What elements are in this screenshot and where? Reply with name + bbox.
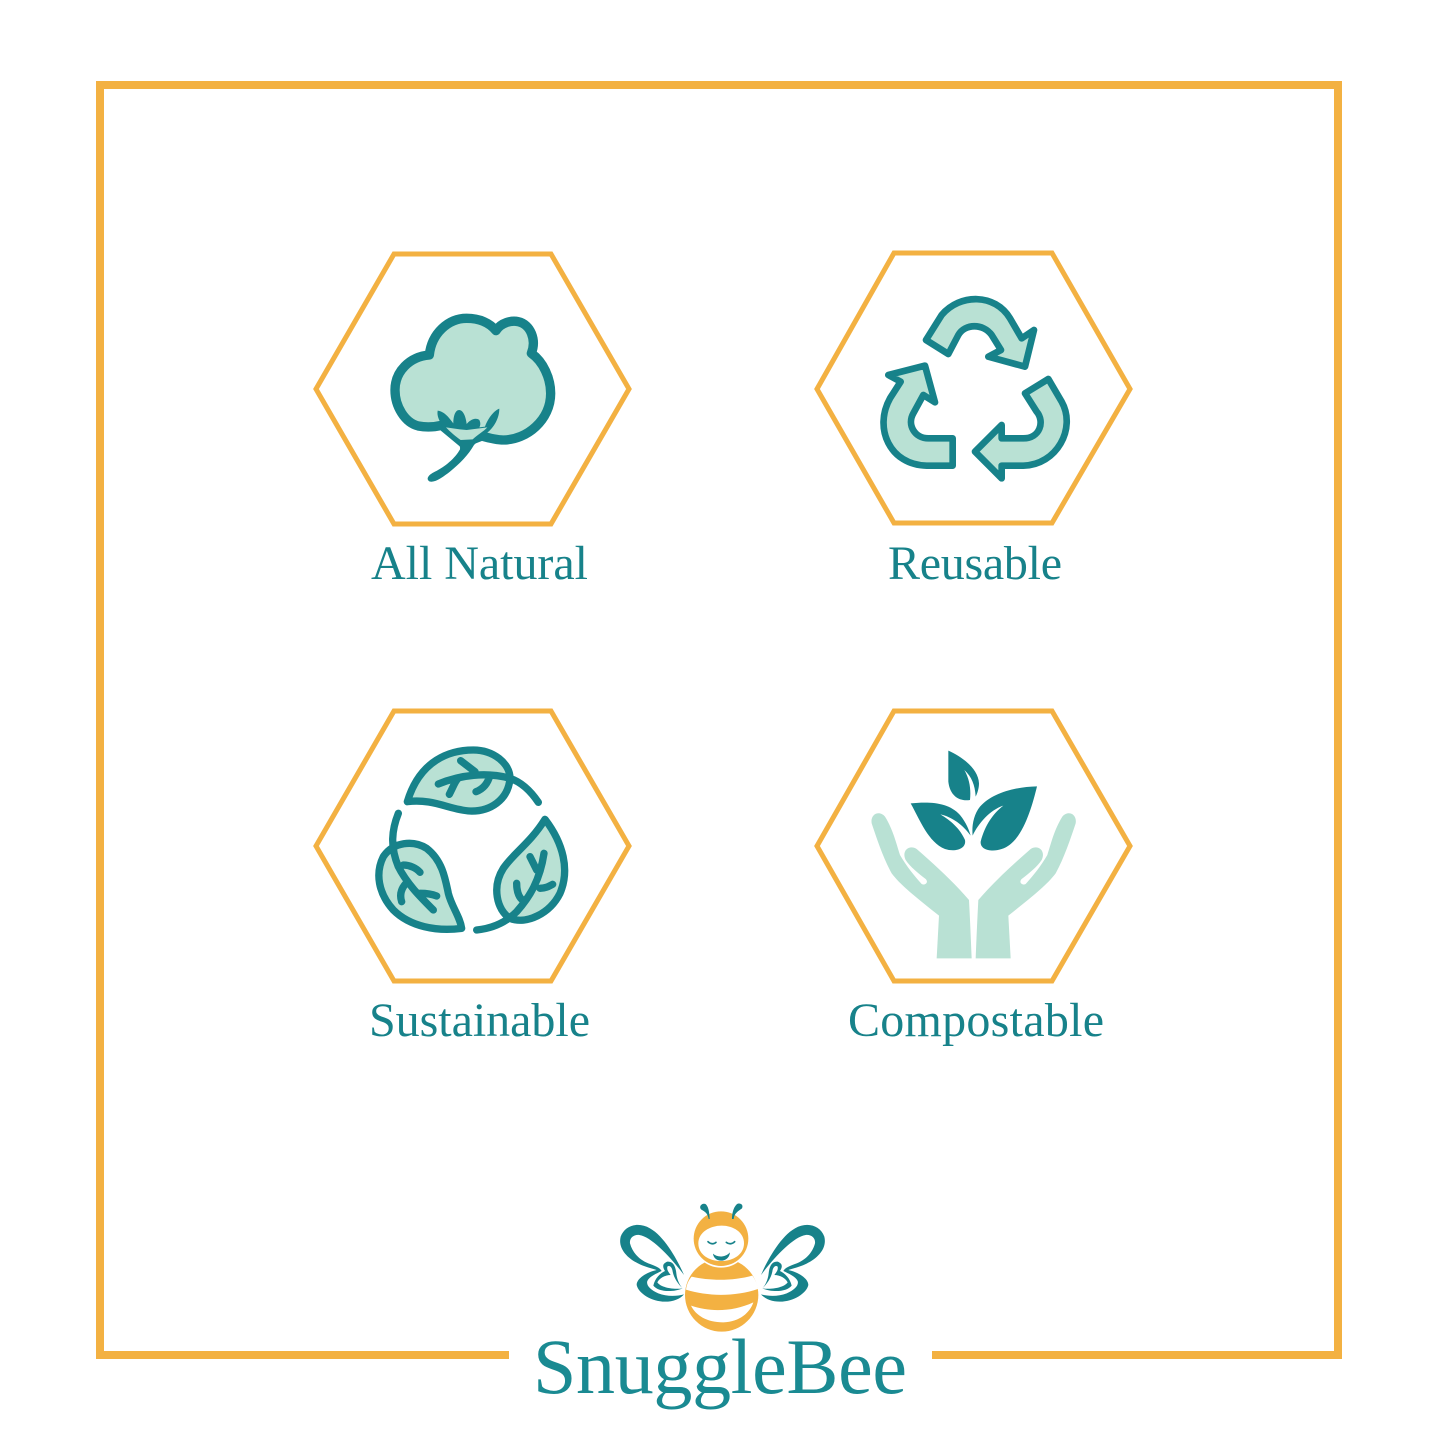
panel: compostable xyxy=(817,711,1130,1047)
label: Compostable: Compostable xyxy=(848,994,1104,1047)
icon: bee xyxy=(620,1204,825,1332)
hexagon: reusable xyxy=(817,253,1130,523)
hexagon: sustainable xyxy=(316,711,629,981)
label: Reusable: Reusable xyxy=(888,537,1062,590)
icon: hands holding plant xyxy=(871,751,1076,958)
panel: all natural xyxy=(316,254,629,590)
icon: three leaves cycle xyxy=(379,750,565,930)
wordmark: SnuggleBee xyxy=(533,1323,907,1410)
label: Sustainable: Sustainable xyxy=(369,994,590,1047)
label: All Natural: All Natural xyxy=(371,537,588,590)
hexagon: compostable xyxy=(817,711,1130,981)
left wing xyxy=(620,1225,684,1302)
orange frame with gap for logo xyxy=(100,85,1338,1355)
body stripes xyxy=(686,1276,758,1295)
hexagon: all natural xyxy=(316,254,629,524)
antennae xyxy=(700,1204,742,1219)
body xyxy=(685,1258,758,1332)
eyes and smile xyxy=(708,1242,735,1244)
icon: recycling arrows xyxy=(884,299,1067,478)
right wing xyxy=(761,1225,825,1302)
head xyxy=(692,1210,750,1268)
panel: reusable xyxy=(817,253,1130,590)
panel: sustainable xyxy=(316,711,629,1047)
logo: SnuggleBee xyxy=(533,1204,907,1410)
icon: cotton boll xyxy=(395,318,551,482)
